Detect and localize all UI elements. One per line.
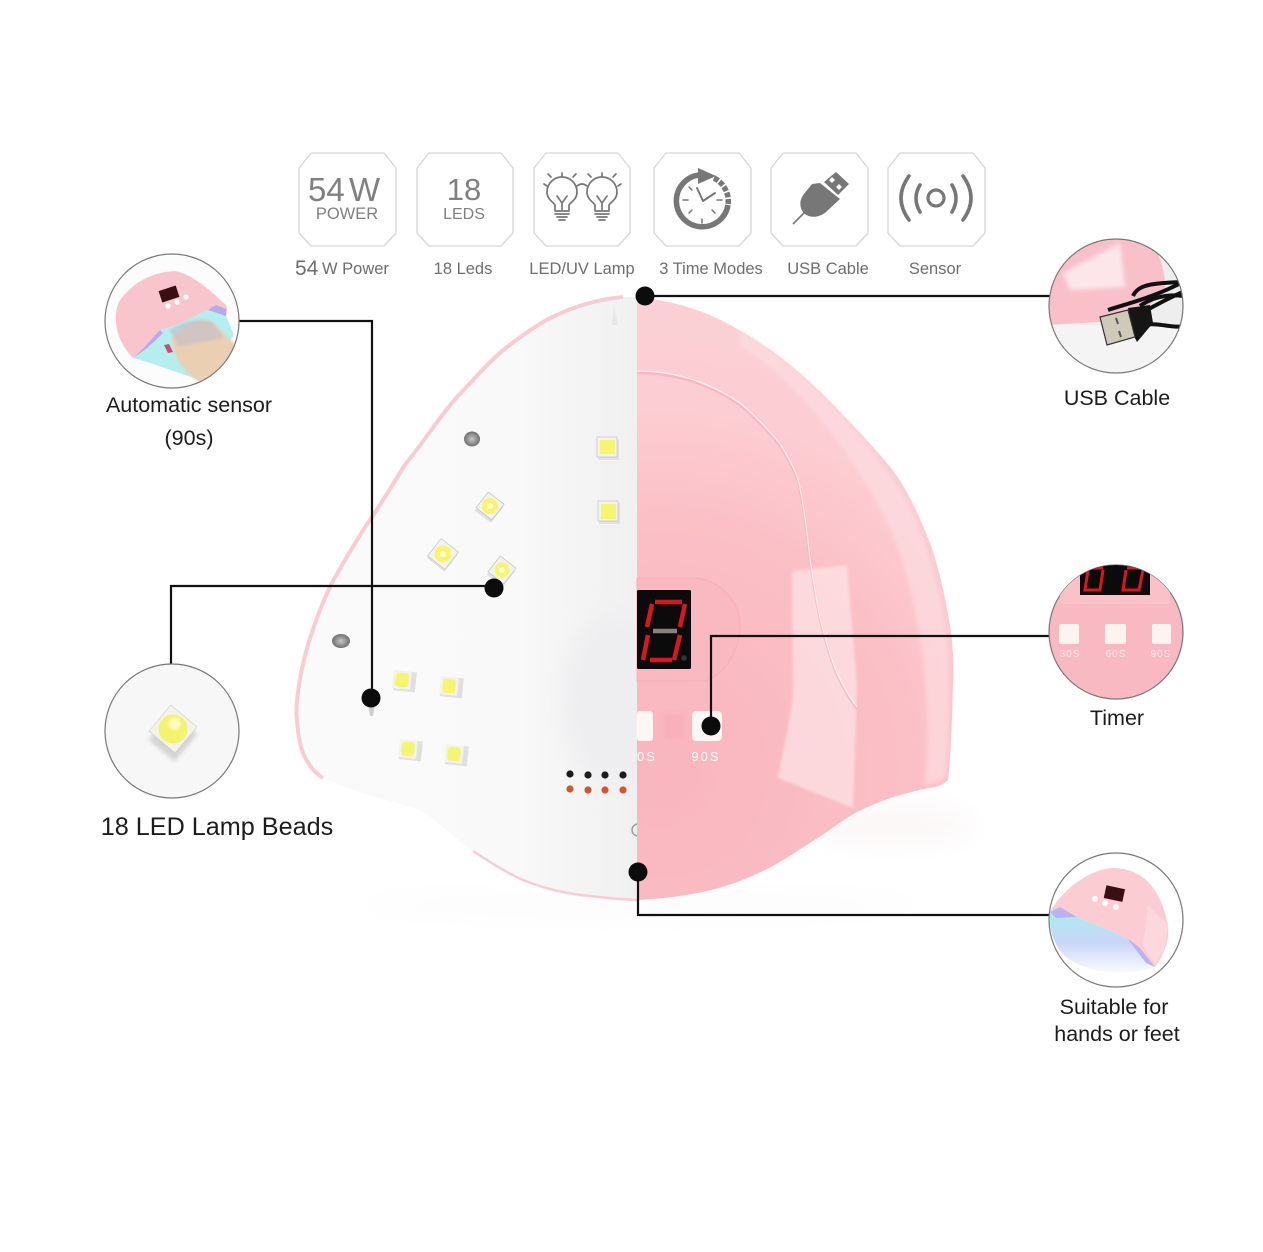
callout: automatic sensor: (90s): [165, 426, 213, 450]
tile captions: LED/UV Lamp: [529, 260, 635, 278]
connector: timer: [702, 636, 1050, 736]
tile captions: W Power: [322, 260, 389, 278]
shell crease: [637, 371, 857, 709]
LED beads: [392, 437, 620, 766]
tile: 18 LEDs: 18: [447, 172, 481, 207]
timer buttons: 0S: [637, 749, 657, 764]
connector: USB cable: [636, 286, 1050, 306]
callout: 18 LED lamp beads: [101, 664, 333, 841]
tile captions: Sensor: [909, 260, 962, 278]
nail lamp main illustration: [296, 297, 975, 919]
connector lines with endpoint dots: [171, 286, 1050, 915]
shell edge highlight: [740, 330, 949, 785]
tile: 54W power: W: [349, 171, 381, 208]
tile: sensor waves: [888, 153, 985, 246]
tile: USB cable: [771, 153, 868, 246]
timer buttons: [637, 711, 722, 764]
timer display: [637, 590, 691, 669]
callout: suitable for hands or feet: [1045, 850, 1190, 1046]
connector: hands or feet: [628, 862, 1050, 915]
tile: 54W power: POWER: [316, 205, 378, 223]
callout: suitable for hands or feet: Suitable for: [1060, 995, 1168, 1019]
tile captions: USB Cable: [787, 260, 869, 278]
tile: time modes clock: [654, 153, 751, 246]
tile captions: [295, 257, 962, 280]
indicator dots: [566, 770, 644, 836]
display surround: [637, 578, 740, 681]
tile: 18 LEDs: [417, 153, 513, 246]
callout: suitable for hands or feet: hands or feet: [1054, 1022, 1180, 1046]
callout: automatic sensor: [100, 250, 272, 450]
callout: USB cable: USB Cable: [1064, 386, 1170, 410]
callout: timer: [1049, 560, 1183, 730]
callout: timer: 90S: [1151, 649, 1171, 660]
callout: USB cable: [1048, 238, 1184, 405]
tile: 54W power: 54: [308, 171, 345, 208]
tile captions: 18 Leds: [434, 260, 492, 278]
tile: 54W power: [299, 153, 396, 246]
lamp right half: pink shell: [637, 297, 953, 900]
tile captions: 3 Time Modes: [659, 260, 763, 278]
tile: LED/UV lamp bulbs: [534, 153, 630, 246]
tile: 18 LEDs: LEDS: [443, 206, 485, 223]
callout: timer: Timer: [1090, 706, 1144, 730]
callout: timer: 30S: [1060, 649, 1080, 660]
tile captions: 54: [295, 257, 319, 280]
shell glare: [778, 565, 857, 808]
connector: automatic sensor: [238, 321, 380, 708]
callout: timer: 60S: [1106, 649, 1126, 660]
lamp left half: white interior: [296, 297, 670, 900]
feature tiles row: [299, 153, 985, 246]
callout: 18 LED lamp beads: 18 LED Lamp Beads: [101, 813, 333, 841]
connector: LED lamp beads: [171, 578, 504, 664]
timer buttons: 90S: [691, 749, 721, 764]
callout: automatic sensor: Automatic sensor: [106, 393, 272, 417]
soft shadow below lamp: [360, 805, 975, 919]
screw holes: [332, 432, 480, 648]
